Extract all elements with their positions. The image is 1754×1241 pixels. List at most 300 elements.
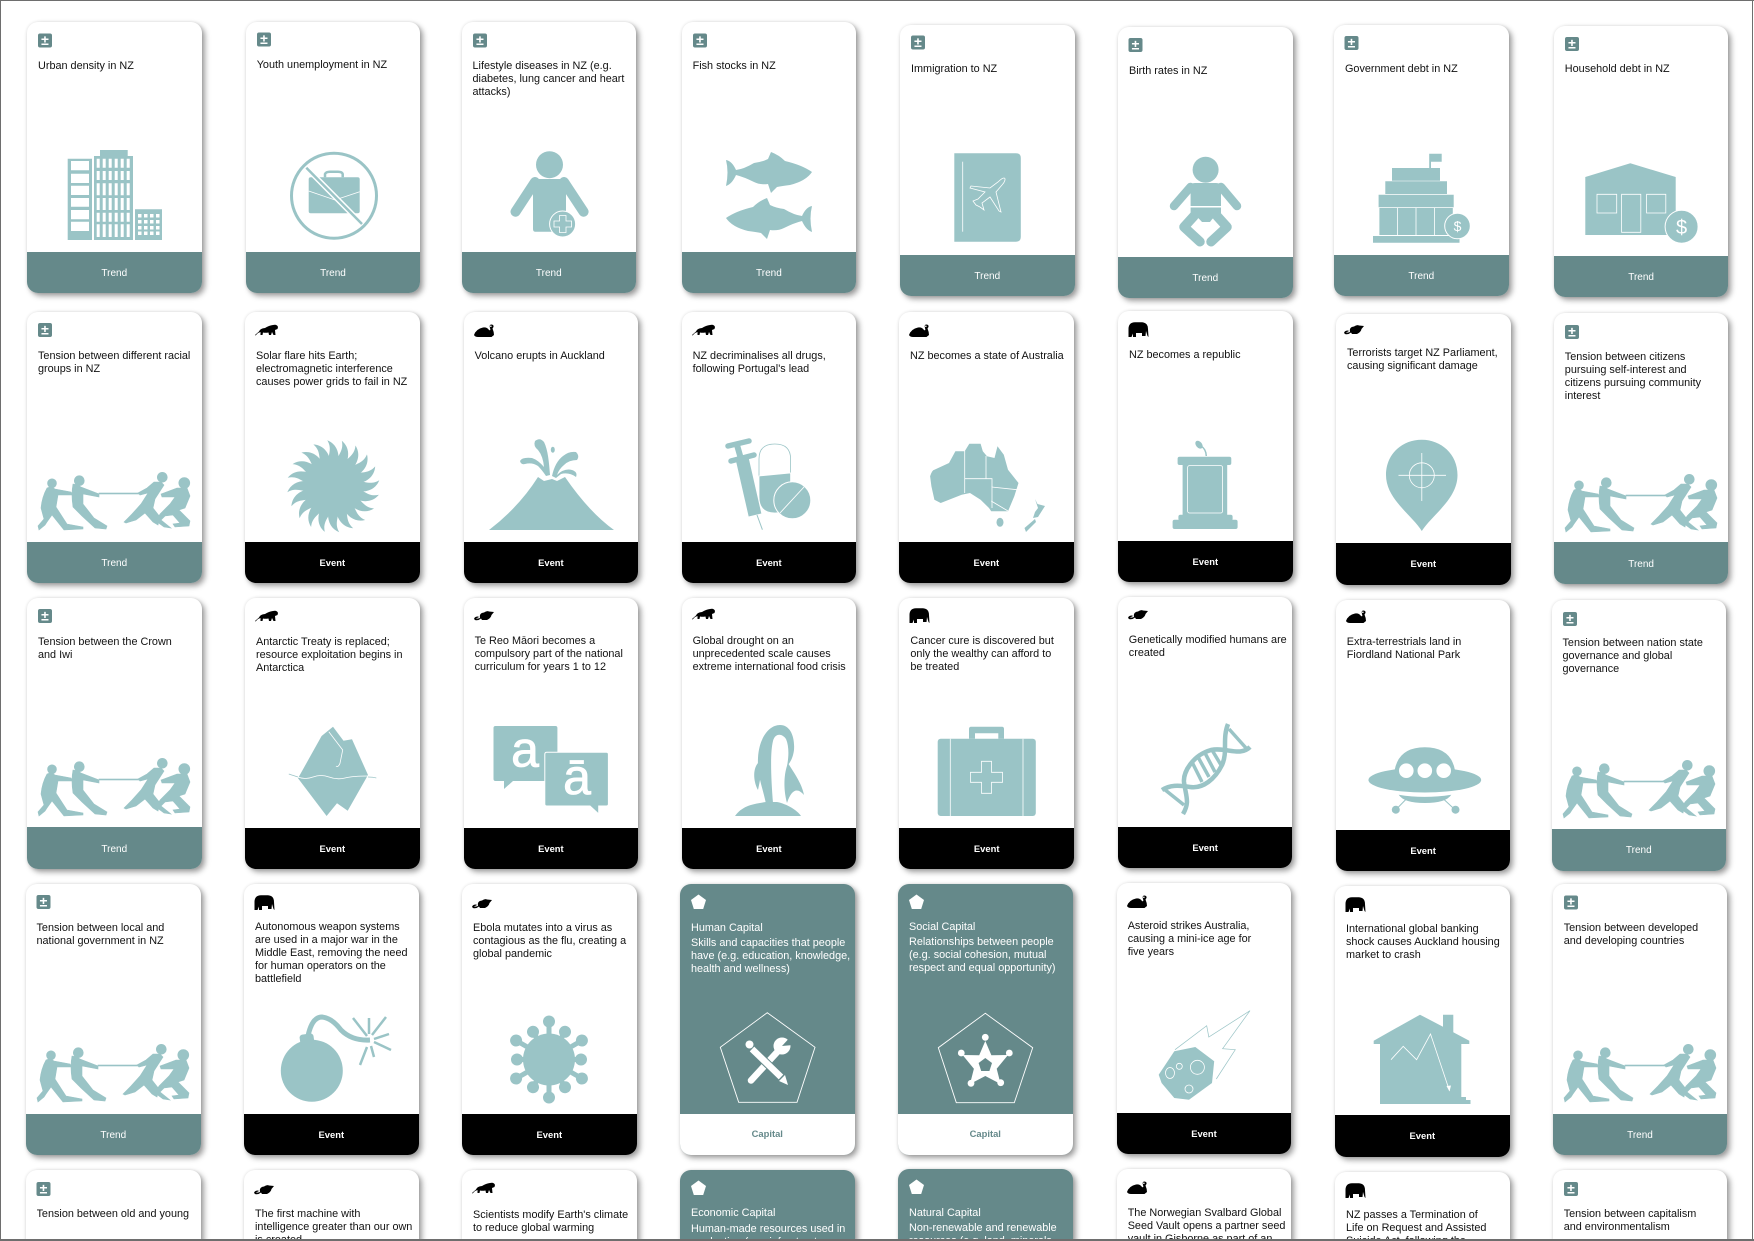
card text xyxy=(691,1207,845,1240)
card type: event: Event xyxy=(974,557,999,568)
card text: Tension between old and young xyxy=(36,1208,189,1220)
card: Svalbard Global Seed Vault xyxy=(1117,1169,1291,1241)
card type: event: Event xyxy=(756,843,782,854)
card text: created xyxy=(1129,647,1165,659)
badge: trend xyxy=(36,1180,50,1196)
badge: trend xyxy=(1562,610,1576,626)
icon: wilted plant xyxy=(735,725,804,816)
card text: compulsory part of the national xyxy=(475,648,623,660)
card text xyxy=(909,1207,1057,1241)
card type: event: Event xyxy=(1193,556,1218,567)
card text: Tension between different racial xyxy=(38,350,190,362)
card text: citizens pursuing community xyxy=(1565,376,1701,388)
icon: syringe capsule and pill xyxy=(728,441,810,530)
badge: trend: ± xyxy=(260,31,268,47)
card text xyxy=(255,921,408,985)
card text: The Norwegian Svalbard Global xyxy=(1128,1206,1281,1218)
card text: Human Capital xyxy=(691,922,763,934)
badge: pentagon xyxy=(691,894,706,909)
card text: following Portugal's lead xyxy=(693,363,809,375)
icon: government building with dollar coin xyxy=(1373,154,1470,243)
card: Tension between developed and developing countries xyxy=(1553,884,1727,1155)
card: Global drought xyxy=(682,598,856,869)
card type: trend: Trend xyxy=(756,268,782,279)
icon: flying saucer xyxy=(1368,747,1481,814)
card text: Fish stocks in NZ xyxy=(693,60,776,72)
card text xyxy=(256,636,402,674)
card text: Economic Capital xyxy=(691,1207,775,1219)
card text: Social Capital xyxy=(909,920,975,932)
card type: trend: Trend xyxy=(1628,559,1654,570)
card: NZ decriminalises all drugs xyxy=(682,312,856,583)
card text: groups in NZ xyxy=(38,363,100,375)
icon: house with dollar coin: $ xyxy=(1676,217,1687,239)
card text: contagious as the flu, creating a xyxy=(473,934,626,946)
card type: event xyxy=(244,1114,419,1155)
card type: capital xyxy=(680,1114,855,1155)
card: Te Reo Maori xyxy=(464,598,638,869)
card: Lifestyle diseases in NZ xyxy=(462,22,636,293)
card type: event xyxy=(245,828,420,869)
badge: trend xyxy=(911,34,925,50)
card text: Tension between capitalism xyxy=(1564,1208,1696,1220)
badge: trend xyxy=(257,31,271,47)
card type: event: Event xyxy=(1410,845,1436,856)
card type: event xyxy=(682,542,856,583)
icon: volcano xyxy=(489,440,614,530)
card text: Household debt in NZ xyxy=(1565,63,1670,75)
badge: trend xyxy=(693,32,707,48)
card text: Fiordland National Park xyxy=(1347,648,1460,660)
icon: speech bubbles a and ā: ā xyxy=(563,749,591,805)
card text xyxy=(256,350,407,388)
card: Social Capital xyxy=(898,884,1073,1155)
card text: Solar flare hits Earth; xyxy=(256,350,357,362)
card type: trend xyxy=(27,827,202,868)
card type: trend xyxy=(27,542,202,583)
card text: attacks) xyxy=(472,86,510,98)
icon: tug of war xyxy=(38,473,190,530)
card type: trend: Trend xyxy=(320,268,346,279)
card type: trend xyxy=(1554,256,1728,297)
card text: NZ becomes a state of Australia xyxy=(910,350,1064,362)
icon: house with dollar coin xyxy=(1585,163,1698,243)
badge: trend xyxy=(1128,36,1142,52)
icon: map of Australia and NZ xyxy=(930,444,1045,532)
card text: Youth unemployment in NZ xyxy=(257,58,387,70)
icon: map pin crosshair xyxy=(1386,439,1458,531)
card text: (e.g. social cohesion, mutual xyxy=(909,948,1046,960)
card text: only the wealthy can afford to xyxy=(910,648,1051,660)
card text: Middle East, removing the need xyxy=(255,947,408,959)
card type: trend xyxy=(682,252,856,293)
card text: Autonomous weapon systems xyxy=(255,921,400,933)
card: Cancer cure xyxy=(899,598,1074,869)
card type: event: Event xyxy=(320,557,345,568)
badge: trend xyxy=(1564,894,1578,910)
card text xyxy=(691,922,850,974)
badge: lion xyxy=(255,611,278,622)
card type: event xyxy=(1336,543,1511,585)
card text: Lifestyle diseases in NZ (e.g. xyxy=(472,60,612,72)
card type: trend: Trend xyxy=(1628,272,1654,283)
card text xyxy=(1129,634,1287,659)
card text: Extra-terrestrials land in xyxy=(1347,636,1461,648)
card text: shock causes Auckland housing xyxy=(1346,936,1500,948)
card: Antarctic Treaty is replaced xyxy=(245,598,420,869)
card: Tension between local and national government xyxy=(26,884,201,1155)
card text: International global banking xyxy=(1346,923,1479,935)
badge: trend: ± xyxy=(1566,610,1574,626)
card text xyxy=(1565,350,1701,402)
card: Terrorists target NZ Parliament xyxy=(1336,314,1511,585)
card: Tension between nation state governance and global governance xyxy=(1552,600,1726,871)
badge: elephant xyxy=(254,895,274,910)
card type: capital: Capital xyxy=(970,1128,1001,1139)
badge: rat xyxy=(254,1185,274,1194)
badge: trend: ± xyxy=(696,32,704,48)
card text xyxy=(1346,1209,1486,1241)
card text: be treated xyxy=(910,661,959,673)
card type: trend: Trend xyxy=(100,1130,126,1141)
card type: trend xyxy=(1553,1114,1727,1155)
card text: NZ passes a Termination of xyxy=(1346,1209,1478,1221)
card text: causing significant damage xyxy=(1347,360,1478,372)
icon: iceberg xyxy=(289,727,376,816)
card text: global pandemic xyxy=(473,948,552,960)
card text xyxy=(1347,636,1461,660)
card: Scientists modify climate xyxy=(462,1170,637,1241)
icon: bomb xyxy=(281,1017,391,1102)
card text: are used in a major war in the xyxy=(255,934,398,946)
card: Household debt in NZ xyxy=(1554,26,1728,297)
card text xyxy=(473,1208,628,1234)
card text: Terrorists target NZ Parliament, xyxy=(1347,347,1498,359)
card text: intelligence greater than our own xyxy=(255,1220,412,1232)
badge: lion xyxy=(255,325,278,336)
badge: rat xyxy=(1128,610,1148,619)
card type: event xyxy=(682,828,856,869)
card type: event xyxy=(899,828,1074,869)
card text: Tension between nation state xyxy=(1562,637,1703,649)
badge: lion xyxy=(692,325,715,336)
card text xyxy=(692,350,826,375)
badge: elephant xyxy=(1346,897,1366,912)
badge: rat xyxy=(472,899,492,908)
badge: pentagon xyxy=(909,1180,924,1194)
card text xyxy=(1346,923,1500,961)
card: Tension between capitalism and environmentalism xyxy=(1553,1170,1727,1241)
icon: baby xyxy=(1174,157,1237,242)
card: International global banking shock xyxy=(1335,886,1510,1156)
card text: Scientists modify Earth's climate xyxy=(473,1208,628,1220)
badge: pentagon xyxy=(909,894,924,909)
card text: Birth rates in NZ xyxy=(1129,64,1207,76)
card text: Skills and capacities that people xyxy=(691,936,845,948)
icon: person with medical cross xyxy=(515,151,583,237)
card type: event: Event xyxy=(756,557,782,568)
icon: tug of war xyxy=(37,1044,189,1102)
card text: Asteroid strikes Australia, xyxy=(1128,920,1249,932)
card type: trend xyxy=(26,1114,201,1155)
card text: Cancer cure is discovered but xyxy=(910,635,1054,647)
card text: and Iwi xyxy=(38,648,72,660)
card: Ebola mutates xyxy=(462,884,637,1155)
card text xyxy=(1128,1206,1285,1240)
card text xyxy=(1564,922,1698,946)
icon: DNA helix xyxy=(1162,724,1250,814)
card text: Te Reo Māori becomes a xyxy=(475,635,595,647)
badge: pentagon xyxy=(691,1180,706,1195)
card: The first machine xyxy=(244,1170,419,1241)
icon: tug of war xyxy=(1565,474,1717,532)
card text: for human operators on the xyxy=(255,960,386,972)
card text: Antarctica xyxy=(256,662,304,674)
icon: no briefcase xyxy=(291,153,376,238)
card: Tension between different racial groups xyxy=(27,312,202,583)
card text: health and wellness) xyxy=(691,962,790,974)
badge: trend xyxy=(38,322,52,338)
card: Termination of Life xyxy=(1335,1172,1510,1241)
card text xyxy=(1128,920,1252,958)
card type: trend: Trend xyxy=(1408,271,1434,282)
icon: two fish xyxy=(726,152,812,239)
icon: house with falling chart xyxy=(1374,1014,1470,1104)
badge: trend xyxy=(1565,323,1579,339)
card type: trend: Trend xyxy=(1192,273,1218,284)
badge: trend: ± xyxy=(40,1180,48,1196)
card type: event: Event xyxy=(538,843,564,854)
icon: city buildings xyxy=(68,150,162,240)
card text: Genetically modified humans are xyxy=(1129,634,1287,646)
card text: Volcano erupts in Auckland xyxy=(475,350,605,362)
card: Tension between the Crown and Iwi xyxy=(27,598,202,868)
card: Government debt in NZ xyxy=(1334,25,1509,296)
card type: trend: Trend xyxy=(1627,1130,1653,1141)
card type: event: Event xyxy=(319,1129,344,1140)
card text: causes power grids to fail in NZ xyxy=(256,376,407,388)
card type: event xyxy=(245,542,420,583)
card type: trend xyxy=(900,255,1075,296)
card type: trend: Trend xyxy=(974,271,1000,282)
badge: trend: ± xyxy=(476,32,484,48)
card text: diabetes, lung cancer and heart xyxy=(472,72,624,84)
card text xyxy=(910,635,1054,673)
card text: curriculum for years 1 to 12 xyxy=(475,661,606,673)
card text: Tension between the Crown xyxy=(38,636,172,648)
card: Genetically modified humans xyxy=(1118,597,1292,868)
card: NZ becomes a state of Australia xyxy=(899,312,1074,583)
badge: lion xyxy=(472,1183,495,1194)
card: Economic Capital xyxy=(680,1170,855,1241)
card text xyxy=(1562,637,1703,675)
badge: elephant xyxy=(1128,322,1148,337)
icon: government building with dollar coin: $ xyxy=(1454,218,1462,234)
badge: trend: ± xyxy=(1348,34,1356,50)
card text: Urban density in NZ xyxy=(38,60,134,72)
card type: trend: Trend xyxy=(101,268,127,279)
badge: trend: ± xyxy=(41,607,49,623)
card text: national government in NZ xyxy=(36,934,164,946)
card text: to reduce global warming xyxy=(473,1222,594,1234)
card: Urban density in NZ xyxy=(27,22,202,293)
card text: NZ becomes a republic xyxy=(1129,349,1240,361)
card: Solar flare xyxy=(245,312,420,583)
card: Fish stocks in NZ xyxy=(682,22,856,293)
card type: trend xyxy=(462,252,636,293)
card type: event: Event xyxy=(1410,1130,1435,1141)
icon: speech bubbles a and ā xyxy=(493,722,608,814)
card text xyxy=(38,636,172,660)
card type: event xyxy=(899,542,1074,583)
card type: trend: Trend xyxy=(536,268,562,279)
card text: resource exploitation begins in xyxy=(256,648,402,660)
card type: event xyxy=(1336,830,1510,871)
card: Volcano erupts in Auckland xyxy=(464,312,638,583)
card text xyxy=(909,920,1056,974)
icon: pentagon with tools xyxy=(720,1013,815,1102)
badge: rat xyxy=(1344,325,1364,334)
icon: virus xyxy=(508,1016,590,1104)
card: Tension between old and young xyxy=(26,1170,201,1241)
card text: Ebola mutates into a virus as xyxy=(473,922,612,934)
icon: medical case xyxy=(938,727,1036,816)
card text: battlefield xyxy=(255,973,301,985)
card: Natural Capital xyxy=(898,1169,1073,1241)
card type: trend xyxy=(1118,257,1293,298)
badge: swan xyxy=(1346,610,1366,623)
badge: trend xyxy=(1344,34,1358,50)
card type: event: Event xyxy=(320,843,345,854)
icon: asteroid xyxy=(1158,1011,1250,1100)
card type: event: Event xyxy=(538,557,564,568)
card: Birth rates in NZ xyxy=(1118,27,1293,298)
card text: pursuing self-interest and xyxy=(1565,364,1687,376)
card text: Human-made resources used in xyxy=(691,1223,845,1235)
icon: speech bubbles a and ā: a xyxy=(511,722,539,778)
badge: trend: ± xyxy=(914,34,922,50)
card text: Relationships between people xyxy=(909,936,1054,948)
card: NZ becomes a republic xyxy=(1118,311,1293,582)
badge: swan xyxy=(909,325,929,337)
card text xyxy=(693,635,846,673)
card type: event xyxy=(1117,1113,1291,1154)
card: Autonomous weapon systems xyxy=(244,884,419,1155)
badge: lion xyxy=(692,609,715,620)
card: Youth unemployment in NZ xyxy=(246,22,420,293)
card text: Immigration to NZ xyxy=(911,62,997,74)
badge: trend xyxy=(38,607,52,623)
card text: Non-renewable and renewable xyxy=(909,1222,1057,1234)
card text: market to crash xyxy=(1346,949,1421,961)
card type: trend: Trend xyxy=(101,558,127,569)
card text: governance xyxy=(1562,663,1619,675)
card type: capital xyxy=(898,1114,1073,1155)
card text xyxy=(1564,1208,1696,1232)
card text xyxy=(1347,347,1498,372)
card type: event: Event xyxy=(1411,558,1436,569)
card: Asteroid strikes Australia xyxy=(1117,883,1291,1154)
badge: trend xyxy=(36,894,50,910)
card text: Seed Vault opens a partner seed xyxy=(1128,1220,1285,1232)
card text: Natural Capital xyxy=(909,1207,981,1219)
badge: trend: ± xyxy=(1567,1180,1575,1196)
icon: podium xyxy=(1173,439,1238,529)
card type: trend xyxy=(1554,542,1728,584)
card text xyxy=(473,922,626,960)
badge: swan xyxy=(474,325,494,337)
badge: trend: ± xyxy=(41,32,49,48)
card type: trend xyxy=(246,252,420,293)
card text: NZ decriminalises all drugs, xyxy=(693,350,826,362)
icon: passport with plane xyxy=(954,153,1021,242)
card type: trend: Trend xyxy=(1626,845,1652,856)
badge: trend xyxy=(38,32,52,48)
card type: trend: Trend xyxy=(101,844,127,855)
badge: trend: ± xyxy=(1568,323,1576,339)
badge: trend: ± xyxy=(41,322,49,338)
card text: Life on Request and Assisted xyxy=(1346,1222,1486,1234)
card text: five years xyxy=(1128,946,1174,958)
icon: tug of war xyxy=(38,758,190,816)
card text: interest xyxy=(1565,390,1600,402)
card: Extra-terrestrials xyxy=(1336,600,1510,871)
badge: trend xyxy=(472,32,486,48)
card text: extreme international food crisis xyxy=(693,661,846,673)
badge: trend xyxy=(1564,1180,1578,1196)
icon: pentagon with people star xyxy=(938,1013,1033,1103)
card text xyxy=(38,350,190,375)
card text: Global drought on an xyxy=(693,635,794,647)
card type: capital: Capital xyxy=(752,1128,783,1139)
card: Human Capital xyxy=(680,884,855,1155)
badge: trend: ± xyxy=(1568,36,1576,52)
card text: governance and global xyxy=(1562,650,1672,662)
card type: event xyxy=(462,1114,637,1155)
badge: trend xyxy=(1565,36,1579,52)
card type: event: Event xyxy=(1192,842,1218,853)
badge: trend: ± xyxy=(1567,894,1575,910)
card type: event xyxy=(464,542,638,583)
card text xyxy=(36,922,164,946)
badge: swan xyxy=(1127,1182,1147,1194)
badge: elephant xyxy=(910,608,930,623)
badge: swan xyxy=(1127,896,1147,908)
card: Tension between citizens xyxy=(1554,312,1728,584)
card text xyxy=(474,635,623,673)
card text: Tension between citizens xyxy=(1565,350,1685,362)
icon: tug of war xyxy=(1564,1044,1716,1102)
card type: event xyxy=(1118,541,1293,582)
card text: The first machine with xyxy=(255,1208,360,1220)
card text: Government debt in NZ xyxy=(1345,62,1458,74)
card type: event: Event xyxy=(974,843,999,854)
card type: trend xyxy=(1334,255,1509,296)
card text: electromagnetic interference xyxy=(256,363,393,375)
card type: event: Event xyxy=(1191,1128,1217,1139)
card text: have (e.g. education, knowledge, xyxy=(691,950,850,962)
card text: and developing countries xyxy=(1564,934,1684,946)
card text: Tension between local and xyxy=(36,922,164,934)
badge: trend: ± xyxy=(1132,36,1140,52)
card type: trend xyxy=(1552,829,1726,871)
card type: event: Event xyxy=(537,1129,562,1140)
card type: event xyxy=(464,828,638,869)
card: Immigration to NZ xyxy=(900,25,1075,296)
badge: rat xyxy=(474,611,494,620)
card text: causing a mini-ice age for xyxy=(1128,933,1251,945)
card type: event xyxy=(1335,1115,1510,1156)
